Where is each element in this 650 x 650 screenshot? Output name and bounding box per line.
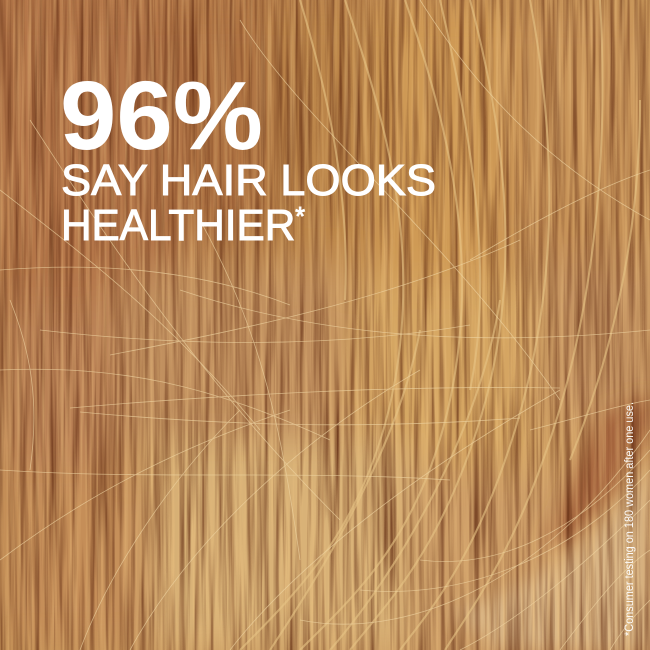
- subheading line 1: SAY HAIR LOOKS: [61, 156, 436, 205]
- subheading line 2: HEALTHIER: [61, 201, 305, 250]
- subheading line 2: *: [295, 201, 305, 231]
- light swoop at lower right: [450, 460, 650, 650]
- footnote rotated along right edge: *Consumer testing on 180 women after one use.: [624, 402, 636, 636]
- dark hair shadow at lower right: [545, 395, 650, 545]
- flowing golden strands: [240, 0, 640, 650]
- headline statistic: 96%: 96%: [60, 61, 263, 170]
- subheading: [61, 156, 436, 250]
